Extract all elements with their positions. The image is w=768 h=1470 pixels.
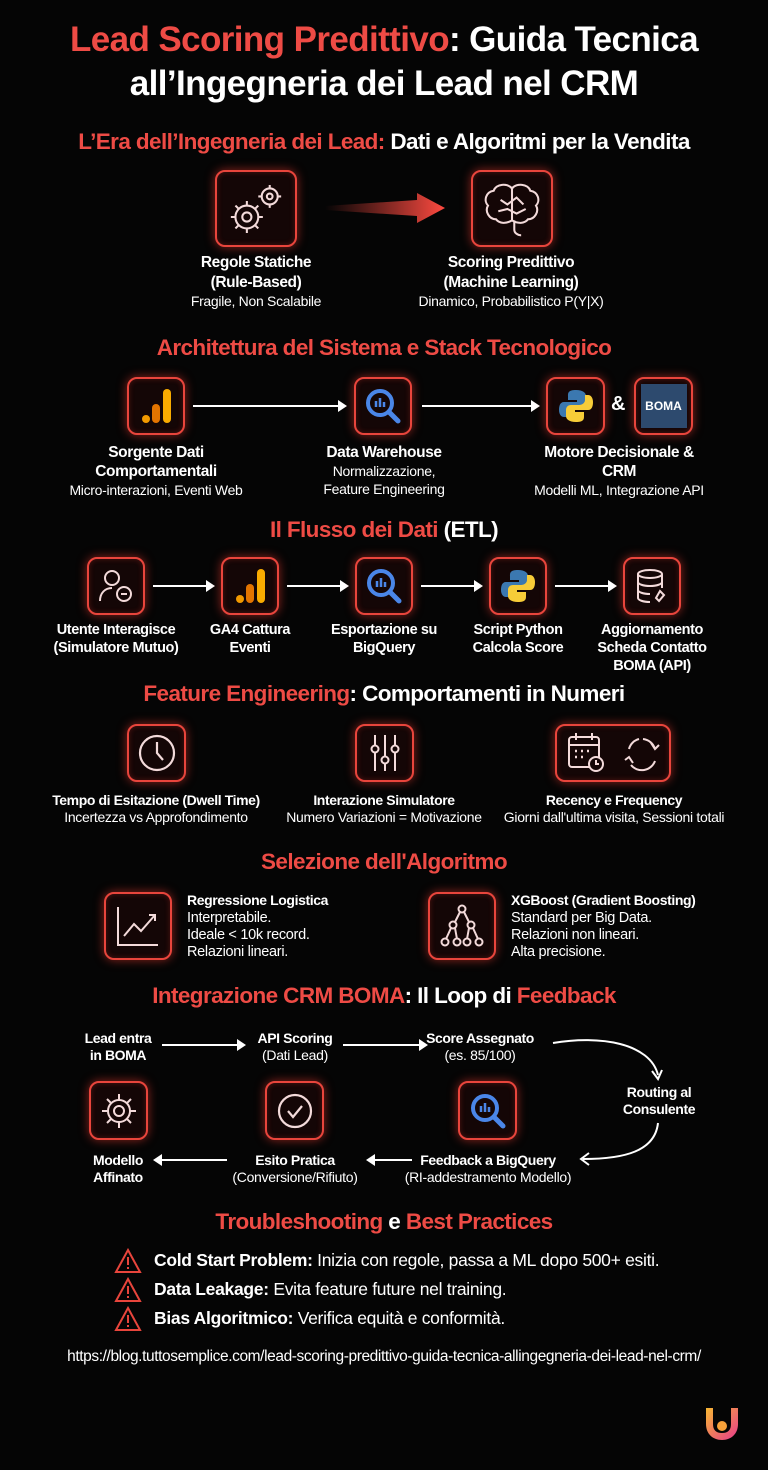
text: esito pratica [232, 1152, 358, 1185]
icon: gears [215, 170, 297, 247]
arrow [421, 585, 481, 587]
text: xgboost [511, 892, 696, 960]
text: esportazione: BigQuery [353, 640, 415, 656]
text: modello affinato [93, 1152, 143, 1185]
text: motore: Modelli ML, Integrazione API [534, 482, 704, 498]
arrow [193, 405, 345, 407]
text: score assegnato: Score Assegnato [426, 1030, 534, 1046]
text: interazione [286, 792, 482, 825]
text: lead entra [85, 1030, 152, 1063]
text: xgboost: Relazioni non lineari. [511, 927, 639, 943]
text: recency [504, 792, 724, 825]
text: ga4 [210, 622, 291, 656]
icon: tree [428, 892, 496, 960]
text: dwell time [52, 792, 260, 825]
heading: flusso: Il Flusso dei Dati (ETL) [270, 517, 498, 542]
text: scoring predittivo [419, 254, 603, 309]
icon: GA4 [127, 377, 185, 435]
text: &: & [611, 393, 625, 415]
icon: brain [471, 170, 553, 247]
url: https://blog.tuttosemplice.com/lead-scoring-predittivo-guida-tecnica-allingegneria-dei-lead-nel-crm/ [67, 1348, 701, 1365]
title [70, 20, 699, 103]
icon: python [546, 377, 605, 435]
icon: user [87, 557, 145, 615]
arrow [343, 1044, 426, 1046]
text: routing [623, 1084, 696, 1117]
text: regressione: Relazioni lineari. [187, 944, 288, 960]
arrow left [368, 1159, 412, 1161]
text: esito pratica: Esito Pratica [255, 1152, 335, 1168]
arrow [153, 585, 213, 587]
text: scoring predittivo: Dinamico, Probabilistico P(Y|X) [419, 293, 603, 309]
heading: feature engineering: Feature Engineering: Comportamenti in Numeri [143, 681, 625, 706]
arrow: curved down [552, 1039, 663, 1081]
text: script: Calcola Score [473, 640, 563, 656]
icon: database [623, 557, 681, 615]
text: lead entra: in BOMA [90, 1047, 146, 1063]
title: all’Ingegneria dei Lead nel CRM [130, 64, 638, 103]
text: aggiornamento: Aggiornamento [601, 622, 703, 638]
text: regressione [187, 892, 328, 960]
title: Lead Scoring Predittivo: Guida Tecnica [70, 20, 698, 59]
text: esito pratica: (Conversione/Rifiuto) [232, 1169, 358, 1185]
text: esportazione: Esportazione su [331, 622, 437, 638]
text: recency: Giorni dall'ultima visita, Sessioni totali [504, 809, 724, 825]
logo [706, 1408, 738, 1440]
text: warehouse: Data Warehouse [326, 444, 442, 461]
arrow: curved back [579, 1122, 659, 1166]
arrow [162, 1044, 244, 1046]
text: script: Script Python [473, 622, 563, 638]
text: modello affinato: Affinato [93, 1169, 143, 1185]
text: regressione: Ideale < 10k record. [187, 927, 310, 943]
text: regressione: Regressione Logistica [187, 892, 328, 908]
heading: era: L’Era dell’Ingegneria dei Lead: Dati e Algoritmi per la Vendita [78, 129, 690, 154]
text: interazione: Numero Variazioni = Motivazione [286, 809, 482, 825]
text: feedback: (RI-addestramento Modello) [405, 1169, 571, 1185]
text: warehouse [323, 444, 445, 497]
text: sorgente: Micro-interazioni, Eventi Web [69, 482, 243, 498]
icon: python [489, 557, 547, 615]
icon: bigquery [355, 557, 413, 615]
list: best practices [114, 1248, 659, 1331]
text: dwell time: Tempo di Esitazione (Dwell Time) [52, 792, 260, 808]
feedback loop [82, 1030, 696, 1185]
text: ga4: GA4 Cattura [210, 622, 290, 638]
text: aggiornamento: BOMA (API) [613, 658, 691, 674]
text: api scoring: API Scoring [258, 1030, 332, 1046]
text: motore: CRM [602, 463, 636, 480]
icon: check [265, 1081, 324, 1140]
text: scoring predittivo: (Machine Learning) [444, 274, 578, 290]
text: api scoring [258, 1030, 332, 1063]
text: warehouse: Feature Engineering [323, 481, 445, 497]
text: sorgente: Sorgente Dati [108, 444, 204, 461]
arrow left [155, 1159, 227, 1161]
icon: gear [89, 1081, 148, 1140]
text: lead entra: Lead entra [85, 1030, 151, 1046]
text: warehouse: Normalizzazione, [333, 463, 435, 479]
text: utente: Utente Interagisce [57, 622, 175, 638]
text: modello affinato: Modello [93, 1152, 143, 1168]
text: script [473, 622, 564, 656]
item: data leakage: Data Leakage: Evita feature future nel training. [154, 1279, 506, 1299]
icon: BOMA [634, 377, 693, 435]
text: feedback: Feedback a BigQuery [420, 1152, 556, 1168]
text: score assegnato: (es. 85/100) [444, 1047, 516, 1063]
text: aggiornamento [597, 622, 707, 674]
text: api scoring: (Dati Lead) [262, 1047, 328, 1063]
heading: integrazione: Integrazione CRM BOMA: Il Loop di Feedback [152, 983, 616, 1008]
icon: BOMA: BOMA [645, 399, 682, 413]
text: sorgente [69, 444, 243, 498]
arrow [555, 585, 615, 587]
text: routing: Consulente [623, 1101, 695, 1117]
item: cold start: Cold Start Problem: Inizia con regole, passa a ML dopo 500+ esiti. [154, 1250, 659, 1270]
text: interazione: Interazione Simulatore [313, 792, 455, 808]
text: xgboost: Standard per Big Data. [511, 910, 652, 926]
text: esportazione [331, 622, 437, 656]
heading: architettura: Architettura del Sistema e Stack Tecnologico [157, 335, 611, 360]
text: regole statiche: (Rule-Based) [211, 274, 301, 290]
text: score assegnato [426, 1030, 534, 1063]
text: sorgente: Comportamentali [95, 463, 217, 480]
text: motore [534, 444, 704, 498]
icon: sliders [355, 724, 414, 782]
text: regole statiche [191, 254, 321, 309]
text: xgboost: XGBoost (Gradient Boosting) [511, 892, 695, 908]
heading: algoritmo: Selezione dell'Algoritmo [261, 849, 507, 874]
arrow [287, 585, 347, 587]
text: motore: Motore Decisionale & [544, 444, 694, 461]
text: utente [54, 622, 178, 656]
item: bias: Bias Algoritmico: Verifica equità e conformità. [154, 1308, 505, 1328]
text: utente: (Simulatore Mutuo) [54, 640, 178, 656]
text: regole statiche: Fragile, Non Scalabile [191, 293, 321, 309]
arrow: red [330, 193, 445, 223]
text: routing: Routing al [627, 1084, 691, 1100]
text: xgboost: Alta precisione. [511, 944, 605, 960]
icon: GA4 [221, 557, 279, 615]
icon: bigquery [458, 1081, 517, 1140]
text: ga4: Eventi [229, 640, 271, 656]
text: feedback [405, 1152, 571, 1185]
text: regressione: Interpretabile. [187, 910, 271, 926]
icon: bigquery [354, 377, 412, 435]
text: aggiornamento: Scheda Contatto [597, 640, 707, 656]
text: recency: Recency e Frequency [546, 792, 682, 808]
icon: chart trend [104, 892, 172, 960]
icon: calendar + refresh [555, 724, 671, 782]
icon: clock [127, 724, 186, 782]
heading: troubleshooting: Troubleshooting e Best Practices [215, 1209, 553, 1234]
text: scoring predittivo: Scoring Predittivo [448, 254, 574, 271]
text: dwell time: Incertezza vs Approfondimento [64, 809, 248, 825]
arrow [422, 405, 538, 407]
text: regole statiche: Regole Statiche [201, 254, 311, 271]
